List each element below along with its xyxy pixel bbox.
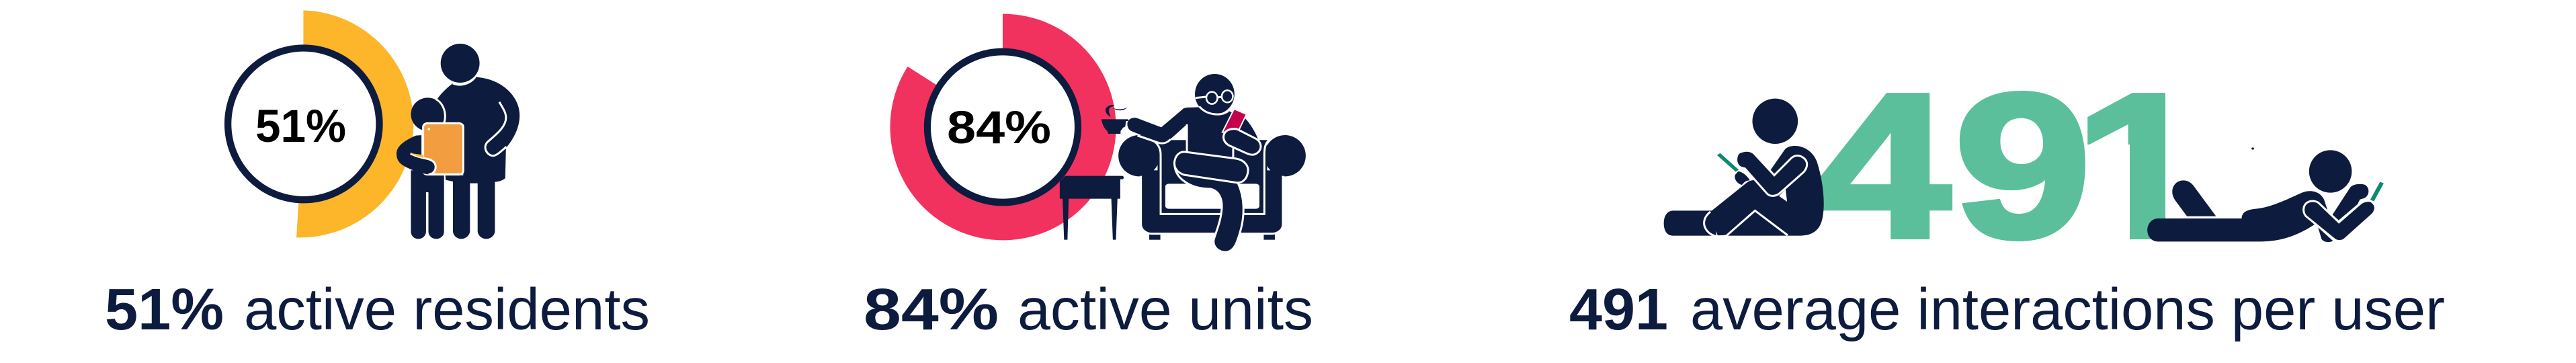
icon: phone [1222, 109, 1247, 132]
label: 491 average interactions per user: 491 [1569, 277, 1668, 342]
icon: phone [2372, 183, 2382, 200]
label: 51% active residents: 51% [105, 277, 224, 342]
panel: active units [864, 14, 1313, 342]
label: 84% active units: active units [1017, 277, 1313, 342]
donut value: 84% [947, 102, 1051, 153]
icon: person in armchair with cup and phone [1060, 74, 1306, 252]
icon: side table [1060, 176, 1124, 240]
panel: active residents [105, 10, 650, 342]
label: 84% active units: 84% [864, 277, 999, 342]
icon: phone [1718, 154, 1737, 171]
big number: 491: 9 [1954, 52, 2091, 280]
label: 84% active units [864, 277, 1313, 342]
big number: 491 [1821, 91, 2165, 241]
icon: sitting person with phone [1664, 99, 1824, 237]
donut chart: 51% [224, 10, 413, 237]
label: 491 average interactions per user: average interactions per user [1690, 277, 2445, 342]
icon: seated person [1127, 74, 1261, 252]
donut chart: 84% [890, 14, 1116, 240]
donut value: 51% [255, 100, 346, 152]
panel: average interactions [1570, 91, 2444, 341]
big number: 491: 4 [1813, 51, 1952, 280]
icon: steaming cup [1102, 105, 1128, 134]
icon: reclining person with phone [2147, 147, 2382, 242]
label: 51% active residents: active residents [244, 277, 650, 342]
icon: adult and child with tablet [397, 44, 520, 239]
big number: 491: 1 [2074, 52, 2211, 280]
icon: armchair [1118, 135, 1306, 240]
